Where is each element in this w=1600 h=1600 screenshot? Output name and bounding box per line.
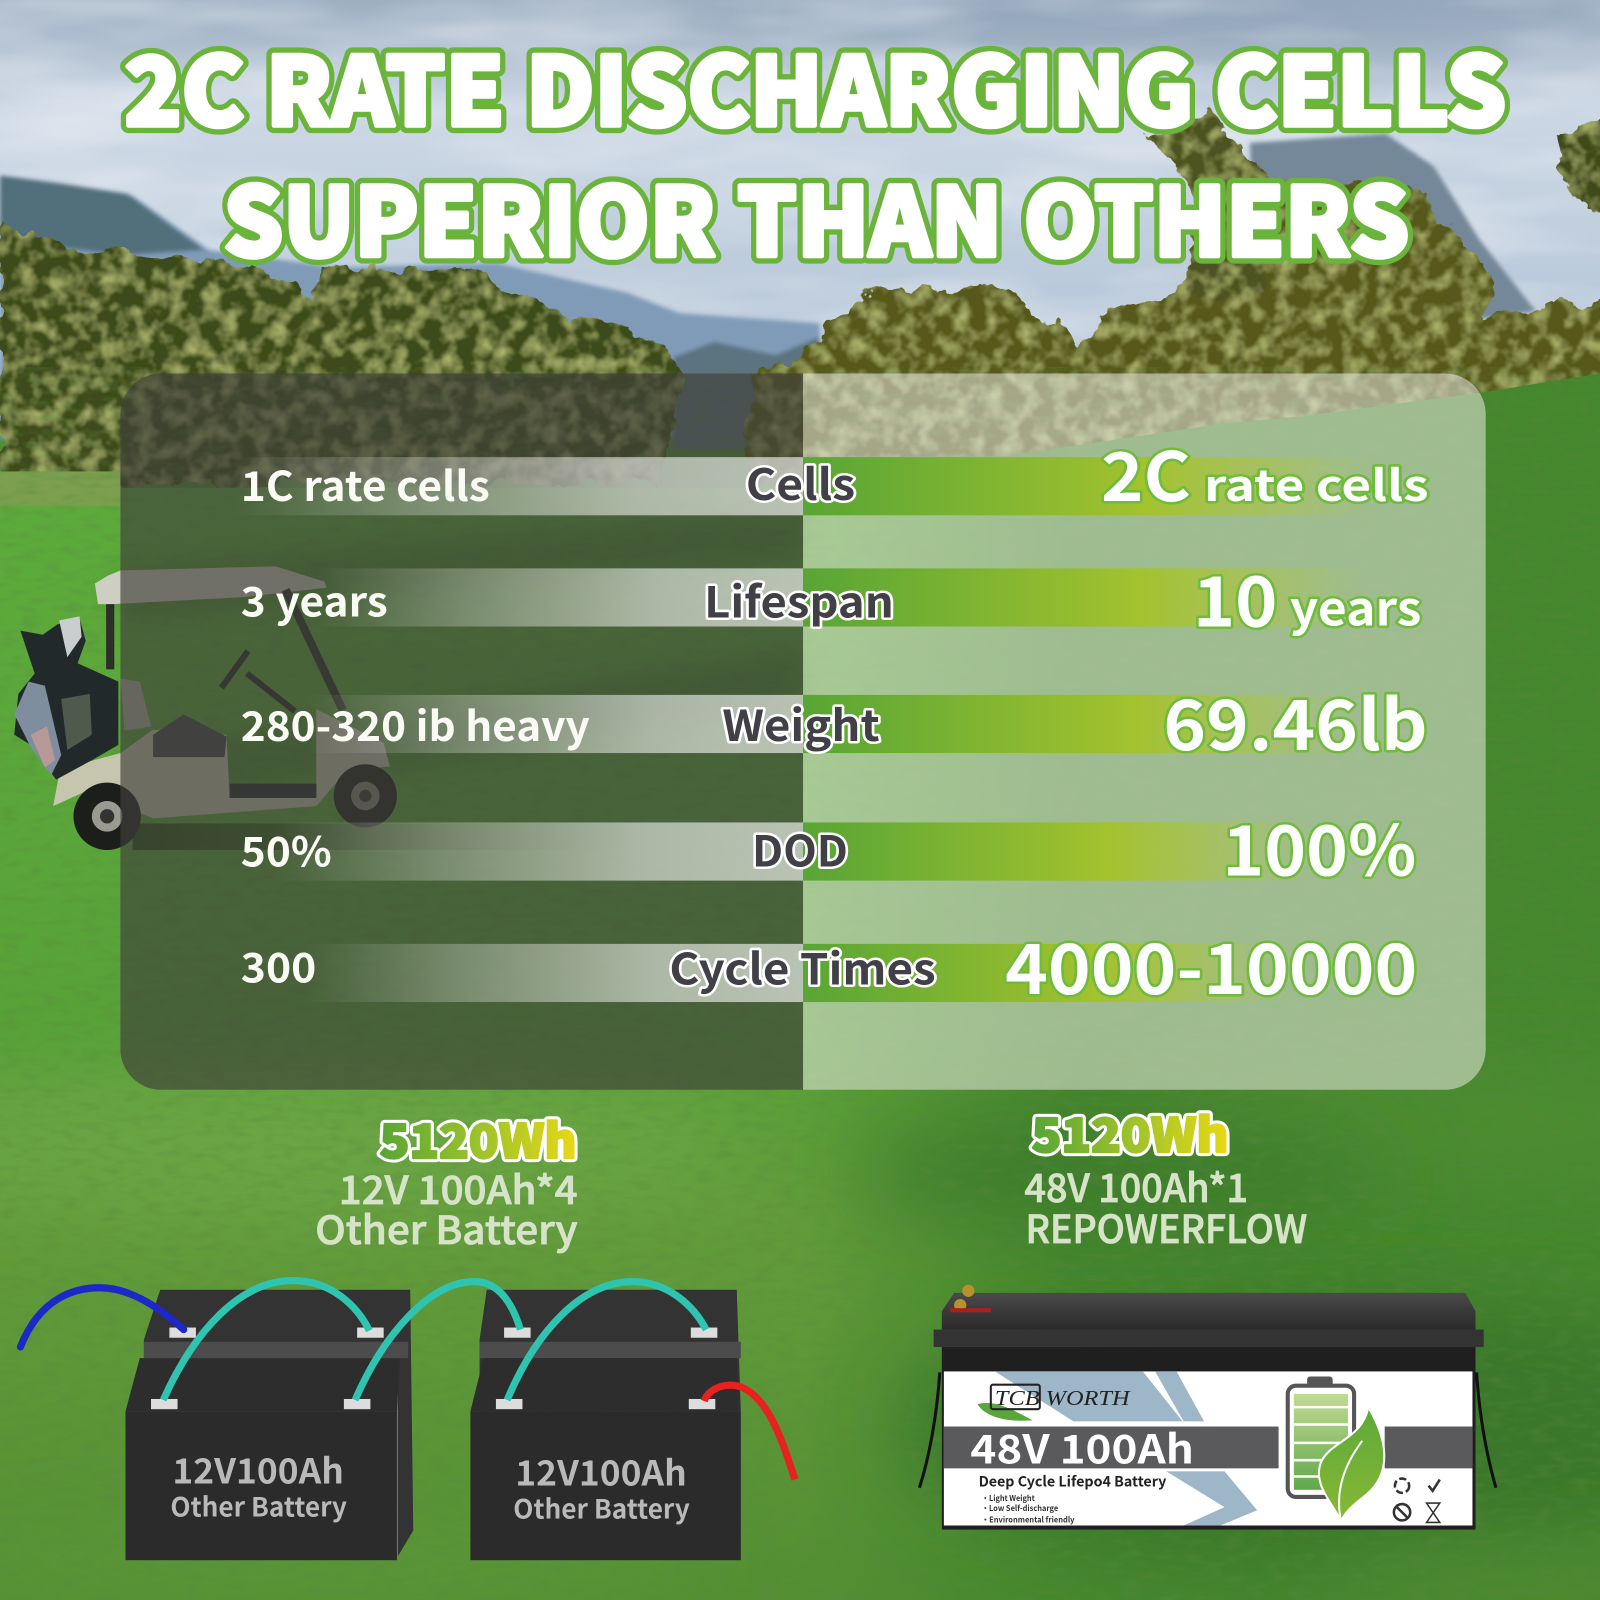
left capacity caption: Other Battery	[315, 1200, 578, 1256]
row: weight	[241, 670, 1428, 770]
right capacity caption: 48V 100Ah*1	[1024, 1158, 1248, 1214]
row: lifespan: 3 years	[241, 569, 388, 628]
row: lifespan: years	[1290, 572, 1421, 640]
cable: teal link 3	[507, 1282, 706, 1400]
panel: left half, other battery	[120, 373, 803, 1090]
sky with clouds	[0, 0, 1600, 429]
bars, right	[803, 457, 1374, 1002]
terminals, lid	[950, 1285, 991, 1312]
row: lifespan: Lifespan	[704, 568, 894, 630]
panel: comparison table	[120, 373, 1486, 1090]
grass mowing stripes behind panel	[120, 510, 803, 806]
golf cart	[14, 566, 643, 850]
row: cells: rate cells	[1204, 452, 1429, 514]
row: cycle times: 300	[241, 936, 316, 995]
cable: blue negative	[20, 1288, 184, 1347]
certification icons	[1394, 1479, 1440, 1522]
row: dod: 100%	[1222, 796, 1416, 896]
cart shadow	[133, 823, 643, 850]
label panel: •Low Self-discharge	[982, 1503, 1058, 1514]
cable: red positive	[704, 1385, 795, 1480]
battery bank: right pair	[470, 1290, 741, 1560]
terminals	[151, 1328, 717, 1409]
mountains	[0, 134, 1536, 449]
panel: right half, repowerflow	[803, 373, 1486, 1090]
label panel: 48V 100Ah	[970, 1418, 1194, 1475]
row: cells: Cells	[746, 451, 855, 513]
battery bank: right pair: Other Battery	[513, 1487, 690, 1526]
four 12V batteries with cables	[20, 1281, 795, 1560]
battery strap wires	[919, 1372, 1496, 1488]
canopy	[95, 566, 327, 604]
body	[53, 709, 390, 818]
left capacity caption: 12V 100Ah*4	[339, 1160, 578, 1216]
title: SUPERIOR THAN OTHERS	[223, 147, 1409, 284]
bars, left	[235, 457, 803, 1002]
battery bank: right pair: 12V100Ah	[515, 1446, 687, 1496]
title	[124, 17, 1506, 284]
battery bank: left pair: Other Battery	[170, 1485, 347, 1524]
trees	[0, 113, 1600, 485]
battery body band	[934, 1330, 1484, 1347]
battery bank: left pair	[126, 1290, 413, 1560]
right capacity caption: 5120Wh	[1032, 1098, 1229, 1166]
label panel: •Environmental friendly	[982, 1514, 1075, 1525]
label panel: Deep Cycle Lifepo4 Battery	[979, 1471, 1166, 1492]
row: cells: 1C rate cells	[241, 454, 490, 513]
row: dod	[241, 796, 1416, 896]
right capacity caption	[1024, 1098, 1307, 1255]
battery lid	[942, 1293, 1476, 1330]
logo	[978, 1385, 1131, 1421]
label panel: •Light Weight	[982, 1493, 1035, 1504]
cable: teal link 2	[355, 1282, 520, 1400]
right capacity caption: REPOWERFLOW	[1026, 1199, 1307, 1255]
row: cycle times: 4000-10000	[1005, 914, 1417, 1014]
row: cells: 2C	[1101, 424, 1191, 521]
battery icon with leaf	[1288, 1377, 1384, 1521]
left capacity caption	[315, 1104, 578, 1256]
row: weight: 280-320 ib heavy	[241, 694, 590, 753]
cable: teal link 1	[163, 1281, 369, 1400]
48V battery	[919, 1285, 1496, 1530]
row: cycle times: Cycle Times	[669, 936, 936, 998]
right capacity caption: 5120Wh	[1032, 1098, 1229, 1166]
logo: TCB WORTH	[995, 1386, 1131, 1410]
left capacity caption: 5120Wh	[380, 1104, 577, 1172]
row: dod: DOD	[752, 817, 848, 879]
title: 2C RATE DISCHARGING CELLS	[124, 17, 1506, 154]
grass	[0, 367, 1600, 1600]
row: lifespan	[241, 547, 1421, 647]
left capacity caption: 5120Wh	[380, 1104, 577, 1172]
row: weight: Weight	[722, 692, 880, 754]
battery bank: left pair: 12V100Ah	[172, 1444, 344, 1494]
row: cells	[241, 424, 1429, 521]
title: SUPERIOR THAN OTHERS	[223, 147, 1409, 284]
row: weight: 69.46lb	[1163, 670, 1428, 770]
title: 2C RATE DISCHARGING CELLS	[124, 17, 1506, 154]
golf bag	[14, 618, 118, 780]
label panel	[944, 1371, 1472, 1526]
row: dod: 50%	[241, 819, 332, 878]
row: lifespan: 10	[1193, 547, 1278, 647]
wheels	[73, 783, 141, 850]
row: cycle times	[241, 914, 1417, 1014]
